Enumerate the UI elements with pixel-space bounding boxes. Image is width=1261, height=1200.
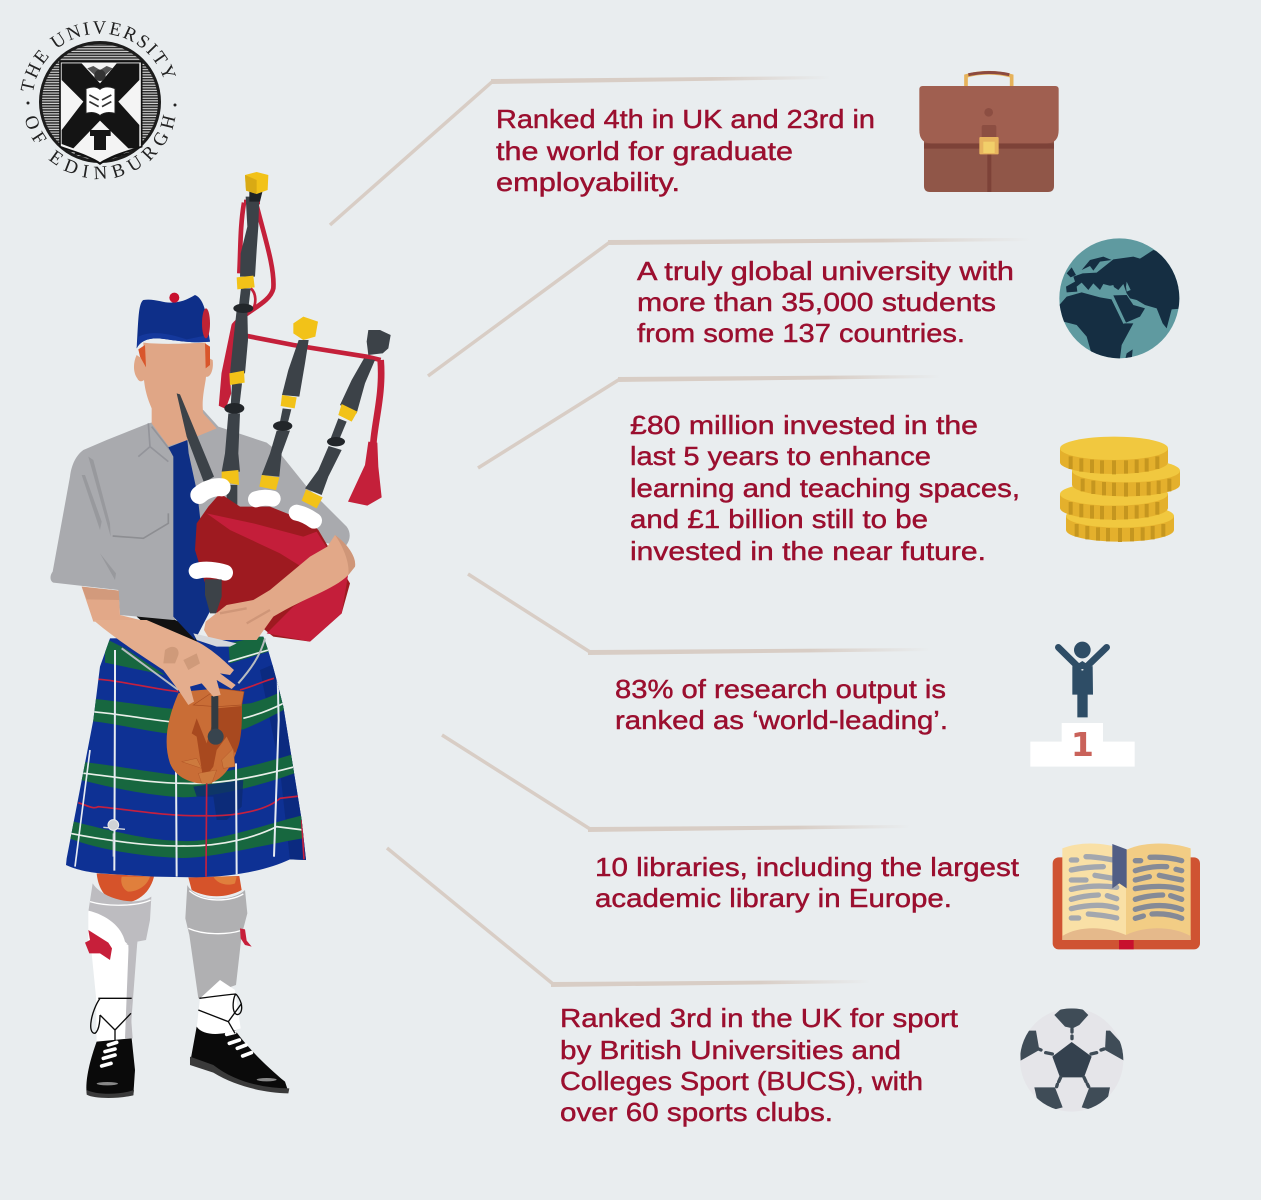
text: libraries: 10 libraries, including the largest (595, 852, 1020, 882)
icon: open book (1053, 844, 1200, 949)
icon: gold coins (1060, 437, 1180, 542)
icon: football (1020, 1008, 1124, 1112)
text: global university: A truly global university with (637, 256, 1014, 286)
logo: University of Edinburgh crest (20, 21, 176, 180)
text: global university (637, 256, 1014, 348)
logo: University of Edinburgh crest: THE UNIVERSITY (20, 21, 176, 91)
text: graduate employability: employability. (496, 167, 680, 197)
text: sport: over 60 sports clubs. (560, 1097, 833, 1127)
illustration: bagpiper (50, 172, 391, 1098)
shoes (86, 994, 289, 1098)
text: investment: last 5 years to enhance (630, 441, 931, 471)
leader line 6 (387, 848, 870, 987)
logo: University of Edinburgh crest: OF EDINBURGH (26, 114, 176, 180)
shirt, belt, tie and head (50, 293, 350, 643)
text: sport: Ranked 3rd in the UK for sport (560, 1003, 959, 1033)
text: graduate employability: Ranked 4th in UK and 23rd in (496, 104, 875, 134)
text: libraries: academic library in Europe. (595, 883, 952, 913)
text: libraries (595, 852, 1020, 913)
icon: winner on podium (1030, 642, 1135, 767)
leader line 5 (442, 735, 910, 832)
text: research output: 83% of research output is (615, 674, 946, 704)
text: sport: by British Universities and (560, 1035, 901, 1065)
icon: winner on podium: 1 (1071, 725, 1094, 764)
text: global university: from some 137 countries. (637, 318, 965, 348)
bagpipe drones and cords (220, 172, 391, 508)
icon: briefcase (919, 72, 1059, 192)
sporran and lower hand (93, 620, 244, 784)
text: graduate employability: the world for graduate (496, 136, 793, 166)
text: research output (615, 674, 948, 735)
kilt (66, 635, 313, 877)
text: investment: and £1 billion still to be (630, 504, 928, 534)
legs and socks (85, 873, 252, 1042)
text: investment: invested in the near future. (630, 536, 986, 566)
icon: globe (1059, 238, 1187, 360)
text: investment (630, 410, 1020, 566)
leader line 1 (330, 76, 830, 225)
text: investment: learning and teaching spaces, (630, 473, 1020, 503)
text: sport (560, 1003, 959, 1127)
arms and upper hand (82, 535, 355, 640)
text: sport: Colleges Sport (BUCS), with (560, 1066, 923, 1096)
leader line 3 (478, 375, 940, 468)
text: research output: ranked as ‘world-leading’. (615, 705, 948, 735)
leader line 4 (468, 574, 930, 655)
bag (177, 393, 350, 642)
leader line 2 (428, 238, 1030, 376)
text: graduate employability (496, 104, 875, 197)
text: investment: £80 million invested in the (630, 410, 978, 440)
text: global university: more than 35,000 students (637, 287, 996, 317)
